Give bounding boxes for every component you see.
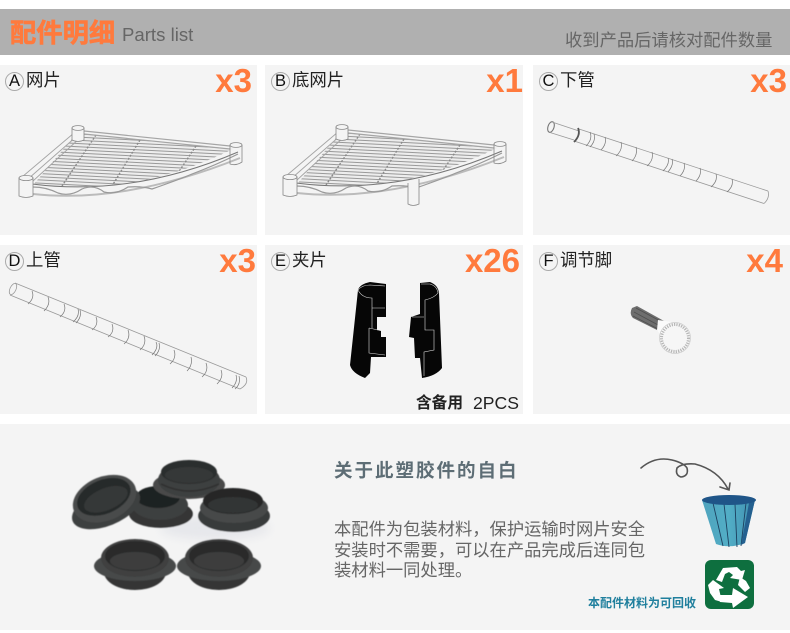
- ring: top: [153, 460, 225, 499]
- quantity: x3: x3: [219, 242, 256, 279]
- note: check the parts count: 收到产品后请核对配件数量: [565, 30, 772, 50]
- ring: tilted left: [61, 466, 146, 538]
- label: A: [5, 70, 61, 91]
- note: includes 2 spare pieces: [416, 393, 519, 413]
- label: E: E: [275, 252, 286, 270]
- panel: E clips: [265, 245, 523, 414]
- heading: parts list english: Parts list: [122, 24, 193, 45]
- photo: black plastic rings: [61, 460, 270, 590]
- label: A: 网片: [26, 70, 61, 90]
- body text: 装材料一同处理。: [334, 560, 472, 580]
- quantity: x3: x3: [215, 62, 252, 99]
- panel: B bottom wire shelf: [265, 65, 523, 235]
- ring: rear middle: [129, 486, 193, 528]
- icon: recycling symbol: [705, 560, 754, 609]
- header band: [0, 9, 790, 55]
- ring: bottom right: [177, 539, 261, 590]
- label: C: C: [543, 72, 554, 90]
- label: D: [5, 250, 61, 271]
- body text: 安装时不需要，可以在产品完成后连同包: [334, 540, 645, 560]
- ring: right: [198, 488, 270, 532]
- heading: parts list chinese: 配件明细: [10, 18, 115, 48]
- label: B: B: [275, 72, 286, 90]
- label: E: 夹片: [292, 250, 327, 270]
- illustration: right clip E: [409, 282, 442, 378]
- illustration: wire shelf A: [19, 125, 242, 200]
- illustration: adjustable foot F: [631, 306, 690, 354]
- label: F: 调节脚: [560, 250, 612, 270]
- quantity: x26: x26: [465, 242, 520, 279]
- arrow: curved into the bin: [641, 459, 730, 490]
- icon: blue waste bin: [702, 495, 756, 547]
- label: F: [539, 250, 612, 271]
- panel: A wire shelf: [0, 65, 257, 235]
- quantity: x4: x4: [746, 242, 783, 279]
- body text: 本配件为包装材料，保护运输时网片安全: [334, 519, 645, 539]
- panel: D upper tube: [0, 245, 257, 414]
- illustration: left clip E: [350, 282, 386, 378]
- label: D: D: [9, 252, 20, 270]
- illustration: upper tube D: [8, 282, 247, 389]
- note: includes 2 spare pieces: 2PCS: [473, 393, 519, 413]
- label: B: 底网片: [292, 70, 344, 90]
- foot tube: [408, 179, 419, 206]
- label: C: [539, 70, 595, 91]
- panel: F adjustable foot: [533, 245, 790, 414]
- label: E: [271, 250, 327, 271]
- note: recyclable material: 本配件材料为可回收: [588, 596, 696, 610]
- label: D: 上管: [26, 250, 61, 270]
- quantity: x3: x3: [750, 62, 787, 99]
- heading: about this plastic part: 关于此塑胶件的自白: [334, 460, 519, 481]
- label: A: A: [9, 72, 20, 90]
- illustration: lower tube C: [546, 121, 768, 204]
- label: C: 下管: [560, 70, 595, 90]
- quantity: x1: x1: [486, 62, 523, 99]
- label: F: F: [543, 252, 554, 270]
- panel: C lower tube: [533, 65, 790, 235]
- ring: bottom left: [94, 539, 176, 590]
- note: includes 2 spare pieces: 含备用: [416, 395, 463, 412]
- illustration: bottom wire shelf B with foot: [283, 124, 506, 206]
- body text: [334, 519, 645, 580]
- panel: plastic part explanation: [0, 424, 790, 630]
- label: B: [271, 70, 344, 91]
